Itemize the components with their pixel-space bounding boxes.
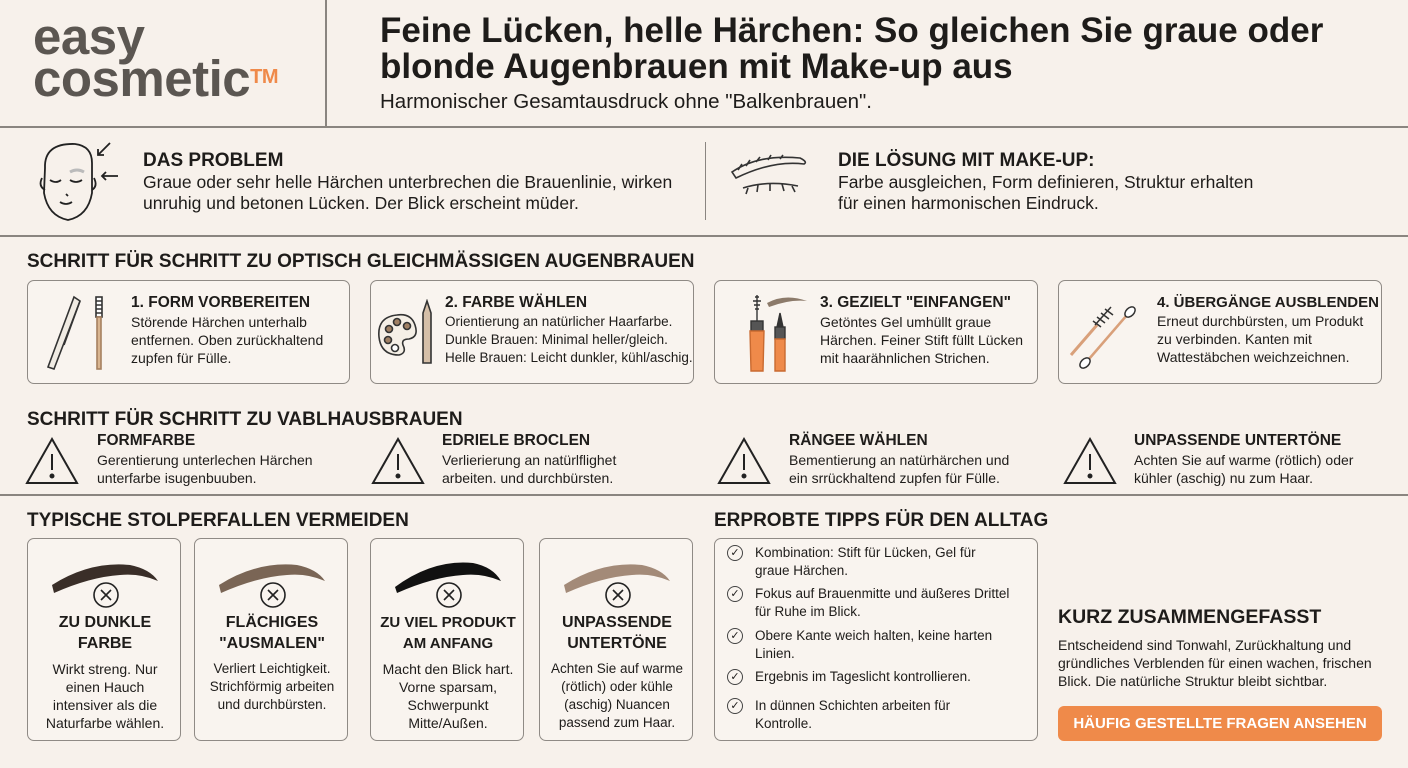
tip 1: [727, 545, 976, 578]
card: step 1: zupfen für Fülle.: [131, 350, 231, 366]
card: step 1: 1. FORM VORBEREITEN: [131, 294, 310, 311]
solution text: für einen harmonischen Eindruck.: [838, 193, 1099, 213]
warning 4: UNPASSENDE UNTERTÖNE: [1134, 432, 1341, 449]
card: step 4: Erneut durchbürsten, um Produkt: [1157, 313, 1363, 329]
title: blonde Augenbrauen mit Make-up aus: [380, 47, 1013, 86]
tip 2: für Ruhe im Blick.: [755, 604, 861, 619]
warning 2: EDRIELE BROCLEN: [442, 432, 590, 449]
tip 5: In dünnen Schichten arbeiten für: [755, 698, 950, 713]
tip 1: graue Härchen.: [755, 563, 848, 578]
card: step 1: entfernen. Oben zurückhaltend: [131, 332, 323, 348]
tip 3: Obere Kante weich halten, keine harten: [755, 628, 992, 643]
pitfall 3: AM ANFANG: [403, 635, 493, 652]
card: step 2: Orientierung an natürlicher Haarfarbe.: [445, 314, 672, 329]
warning 4: [1063, 431, 1354, 486]
pitfall 4: UNPASSENDE: [562, 614, 672, 631]
warning 3: [717, 432, 1009, 486]
tip 3: [727, 628, 992, 661]
problem text: DAS PROBLEM: [143, 150, 283, 171]
tip 5: [727, 698, 950, 731]
card: step 3: [714, 280, 1038, 384]
card: step 2: [370, 280, 694, 384]
tip 4: ✓: [730, 671, 740, 683]
title: Feine Lücken, helle Härchen: So gleichen Sie graue oder: [380, 11, 1323, 50]
warning 3: RÄNGEE WÄHLEN: [789, 432, 928, 449]
warning 1: [25, 432, 313, 486]
pitfall 3: Vorne sparsam,: [399, 679, 497, 695]
summary: gründliches Verblenden für einen wachen, frischen: [1058, 655, 1372, 671]
card: step 4: Wattestäbchen weichzeichnen.: [1157, 349, 1349, 365]
warning 2: Verlierierung an natürlflighet: [442, 452, 616, 468]
icon: face: [40, 142, 118, 221]
warning 1: unterfarbe isugenbuuben.: [97, 470, 257, 486]
warning 3: Bementierung an natürhärchen und: [789, 452, 1009, 468]
tip 5: ✓: [730, 700, 740, 712]
pitfall 1: ZU DUNKLE: [59, 614, 151, 631]
warning 2: arbeiten. und durchbürsten.: [442, 470, 613, 486]
tip 3: Linien.: [755, 646, 795, 661]
pitfall 1: einen Hauch: [66, 679, 144, 695]
card: step 4: zu verbinden. Kanten mit: [1157, 331, 1312, 347]
pitfall 2: FLÄCHIGES: [226, 614, 318, 631]
solution text: DIE LÖSUNG MIT MAKE-UP:: [838, 150, 1094, 171]
pitfall 3: Mitte/Außen.: [408, 715, 488, 731]
solution text: [838, 149, 1253, 213]
summary: [1058, 606, 1372, 689]
tips box: [714, 538, 1038, 741]
tip 1: Kombination: Stift für Lücken, Gel für: [755, 545, 976, 560]
heading: pitfalls: TYPISCHE STOLPERFALLEN VERMEIDEN: [27, 510, 409, 531]
warning 3: ein srrückhaltend zupfen für Fülle.: [789, 470, 1000, 486]
pitfall 2: Strichförmig arbeiten: [210, 679, 334, 694]
pitfall 1: FARBE: [78, 635, 132, 652]
tip 2: Fokus auf Brauenmitte und äußeres Drittel: [755, 586, 1009, 601]
card: step 1: [27, 280, 350, 384]
summary: Blick. Die natürliche Struktur bleibt sichtbar.: [1058, 673, 1327, 689]
heading: tips: ERPROBTE TIPPS FÜR DEN ALLTAG: [714, 510, 1048, 531]
pitfall 1: Wirkt streng. Nur: [52, 661, 158, 677]
warning 2: [371, 432, 616, 486]
solution text: Farbe ausgleichen, Form definieren, Struktur erhalten: [838, 172, 1253, 192]
tip 4: Ergebnis im Tageslicht kontrollieren.: [755, 669, 971, 684]
warning 4: Achten Sie auf warme (rötlich) oder: [1134, 452, 1353, 468]
button: FAQ: HÄUFIG GESTELLTE FRAGEN ANSEHEN: [1073, 715, 1367, 732]
problem text: unruhig und betonen Lücken. Der Blick erscheint müder.: [143, 193, 579, 213]
title: [380, 11, 1323, 86]
problem text: [143, 150, 672, 213]
warning 1: FORMFARBE: [97, 432, 195, 449]
tip 5: Kontrolle.: [755, 716, 812, 731]
logo: cosmeticTM: [33, 50, 278, 107]
subtitle: Harmonischer Gesamtausdruck ohne "Balkenbrauen".: [380, 90, 872, 113]
pitfall 2: "AUSMALEN": [219, 635, 325, 652]
card: step 2: Dunkle Brauen: Minimal heller/gleich.: [445, 332, 668, 347]
pitfall 2: und durchbürsten.: [218, 697, 326, 712]
pitfall 1: intensiver als die: [53, 697, 157, 713]
pitfall 1: [27, 538, 181, 741]
warning 1: Gerentierung unterlechen Härchen: [97, 452, 313, 468]
pitfall 4: UNTERTÖNE: [567, 635, 667, 652]
card: step 3: Getöntes Gel umhüllt graue: [820, 314, 991, 330]
pitfall 3: [370, 538, 524, 741]
card: step 2: 2. FARBE WÄHLEN: [445, 294, 587, 311]
card: step 1: Störende Härchen unterhalb: [131, 314, 307, 330]
pitfall 4: (aschig) Nuancen: [564, 697, 670, 712]
pitfall 2: Verliert Leichtigkeit.: [213, 661, 331, 676]
summary: KURZ ZUSAMMENGEFASST: [1058, 606, 1321, 628]
tip 1: ✓: [730, 547, 740, 559]
pitfall 4: (rötlich) oder kühle: [561, 679, 673, 694]
pitfall 4: [539, 538, 693, 741]
card: step 3: 3. GEZIELT "EINFANGEN": [820, 294, 1011, 311]
card: step 4: [1058, 280, 1382, 384]
tip 2: ✓: [730, 588, 740, 600]
heading: second steps: SCHRITT FÜR SCHRITT ZU VABLHAUSBRAUEN: [27, 409, 463, 430]
tip 3: ✓: [730, 630, 740, 642]
pitfall 3: Schwerpunkt: [408, 697, 488, 713]
tip 2: [727, 586, 1009, 619]
card: step 4: 4. ÜBERGÄNGE AUSBLENDEN: [1157, 294, 1379, 311]
button: FAQ: [1058, 706, 1382, 741]
pitfall 3: Macht den Blick hart.: [383, 661, 513, 677]
logo: easy: [33, 8, 144, 65]
card: step 2: Helle Brauen: Leicht dunkler, kühl/aschig.: [445, 350, 693, 365]
pitfall 4: passend zum Haar.: [559, 715, 675, 730]
logo: [33, 8, 278, 107]
card: step 3: mit haarähnlichen Strichen.: [820, 350, 990, 366]
pitfall 4: Achten Sie auf warme: [551, 661, 683, 676]
problem text: Graue oder sehr helle Härchen unterbrechen die Brauenlinie, wirken: [143, 172, 672, 192]
pitfall 2: [194, 538, 348, 741]
heading: steps: SCHRITT FÜR SCHRITT ZU OPTISCH GLEICHMÄSSIGEN AUGENBRAUEN: [27, 251, 694, 272]
card: step 3: Härchen. Feiner Stift füllt Lücken: [820, 332, 1023, 348]
warning 4: kühler (aschig) nu zum Haar.: [1134, 470, 1313, 486]
pitfall 1: Naturfarbe wählen.: [46, 715, 164, 731]
summary: Entscheidend sind Tonwahl, Zurückhaltung und: [1058, 637, 1351, 653]
icon: eyebrow eye: [731, 154, 806, 194]
pitfall 3: ZU VIEL PRODUKT: [380, 614, 516, 631]
